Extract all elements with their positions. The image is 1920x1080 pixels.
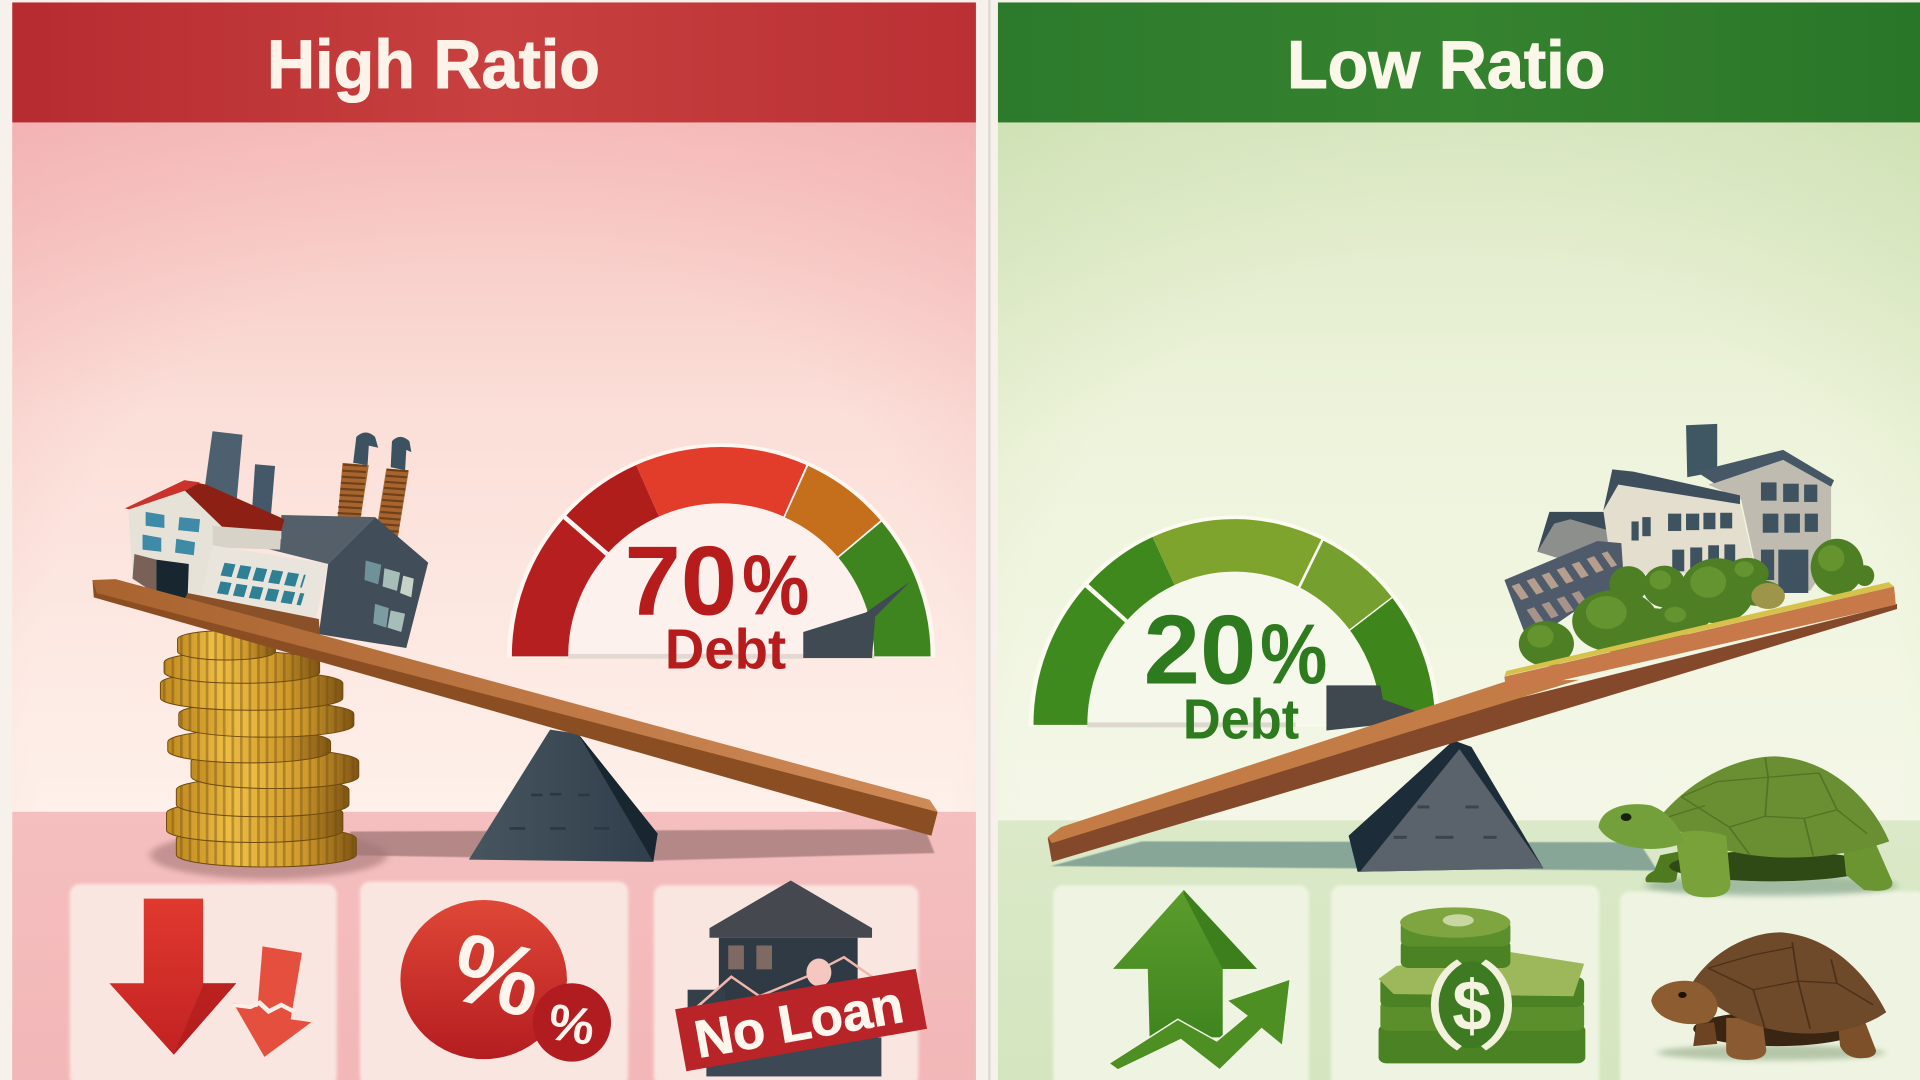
gauge needle (1326, 685, 1437, 730)
panel: high ratio (12, 2, 976, 1080)
gauge value: 70%: 70 (624, 526, 737, 636)
gauge value: 70% (624, 526, 809, 636)
icon: green turtle (1599, 756, 1892, 897)
header: high ratio: High Ratio (267, 26, 600, 103)
icon: percent discs: % (545, 992, 598, 1056)
panel background: floor (12, 812, 976, 1080)
buildings on seesaw: house and factory (125, 431, 428, 648)
panel divider (988, 0, 991, 1080)
gauge label: debt: Debt (665, 618, 786, 681)
icon: no loan house and banner: No Loan (690, 975, 908, 1070)
gauge value: 70%: % (742, 538, 809, 634)
header: low ratio: Low Ratio (1287, 28, 1605, 103)
tile: tortoise background (1620, 891, 1920, 1080)
icon: percent discs: % (441, 911, 552, 1039)
ground shadow: right seesaw (1051, 841, 1897, 896)
seesaw pivot (1349, 740, 1543, 872)
gauge: 20% debt (1029, 516, 1440, 727)
tile: falling arrows background (70, 884, 337, 1080)
icon: brown tortoise (1651, 932, 1886, 1060)
tile: no loan background (654, 885, 918, 1080)
header: low ratio (998, 2, 1920, 122)
gauge value: 20%: 20 (1144, 594, 1256, 704)
header: high ratio (12, 2, 976, 122)
seesaw pivot (469, 730, 658, 862)
icon: no loan house and banner (675, 880, 927, 1076)
icon: stack of money (1379, 907, 1585, 1063)
panel background: wall (12, 122, 976, 813)
icon: percent discs (400, 900, 611, 1062)
tile: rising arrows background (1053, 885, 1309, 1080)
seesaw plank (93, 579, 938, 836)
ground shadow: left seesaw (150, 829, 935, 879)
icon: falling arrows (109, 899, 311, 1057)
gauge value: 20% (1144, 594, 1327, 704)
coin stack (160, 631, 359, 867)
panel background: wall (998, 122, 1920, 823)
gauge value: 20%: % (1260, 606, 1327, 702)
tile: percent background (360, 882, 628, 1080)
icon: rising arrows (1109, 890, 1290, 1070)
gauge needle (803, 582, 910, 658)
tile: money background (1331, 885, 1599, 1080)
panel: low ratio (998, 2, 1920, 1080)
seesaw plank (1048, 582, 1897, 862)
panel background: floor (998, 820, 1920, 1080)
gauge: 70% debt (507, 443, 936, 659)
icon: stack of money: $ (1452, 967, 1491, 1046)
buildings and trees on seesaw (1504, 424, 1874, 666)
gauge label: debt: Debt (1183, 687, 1299, 750)
